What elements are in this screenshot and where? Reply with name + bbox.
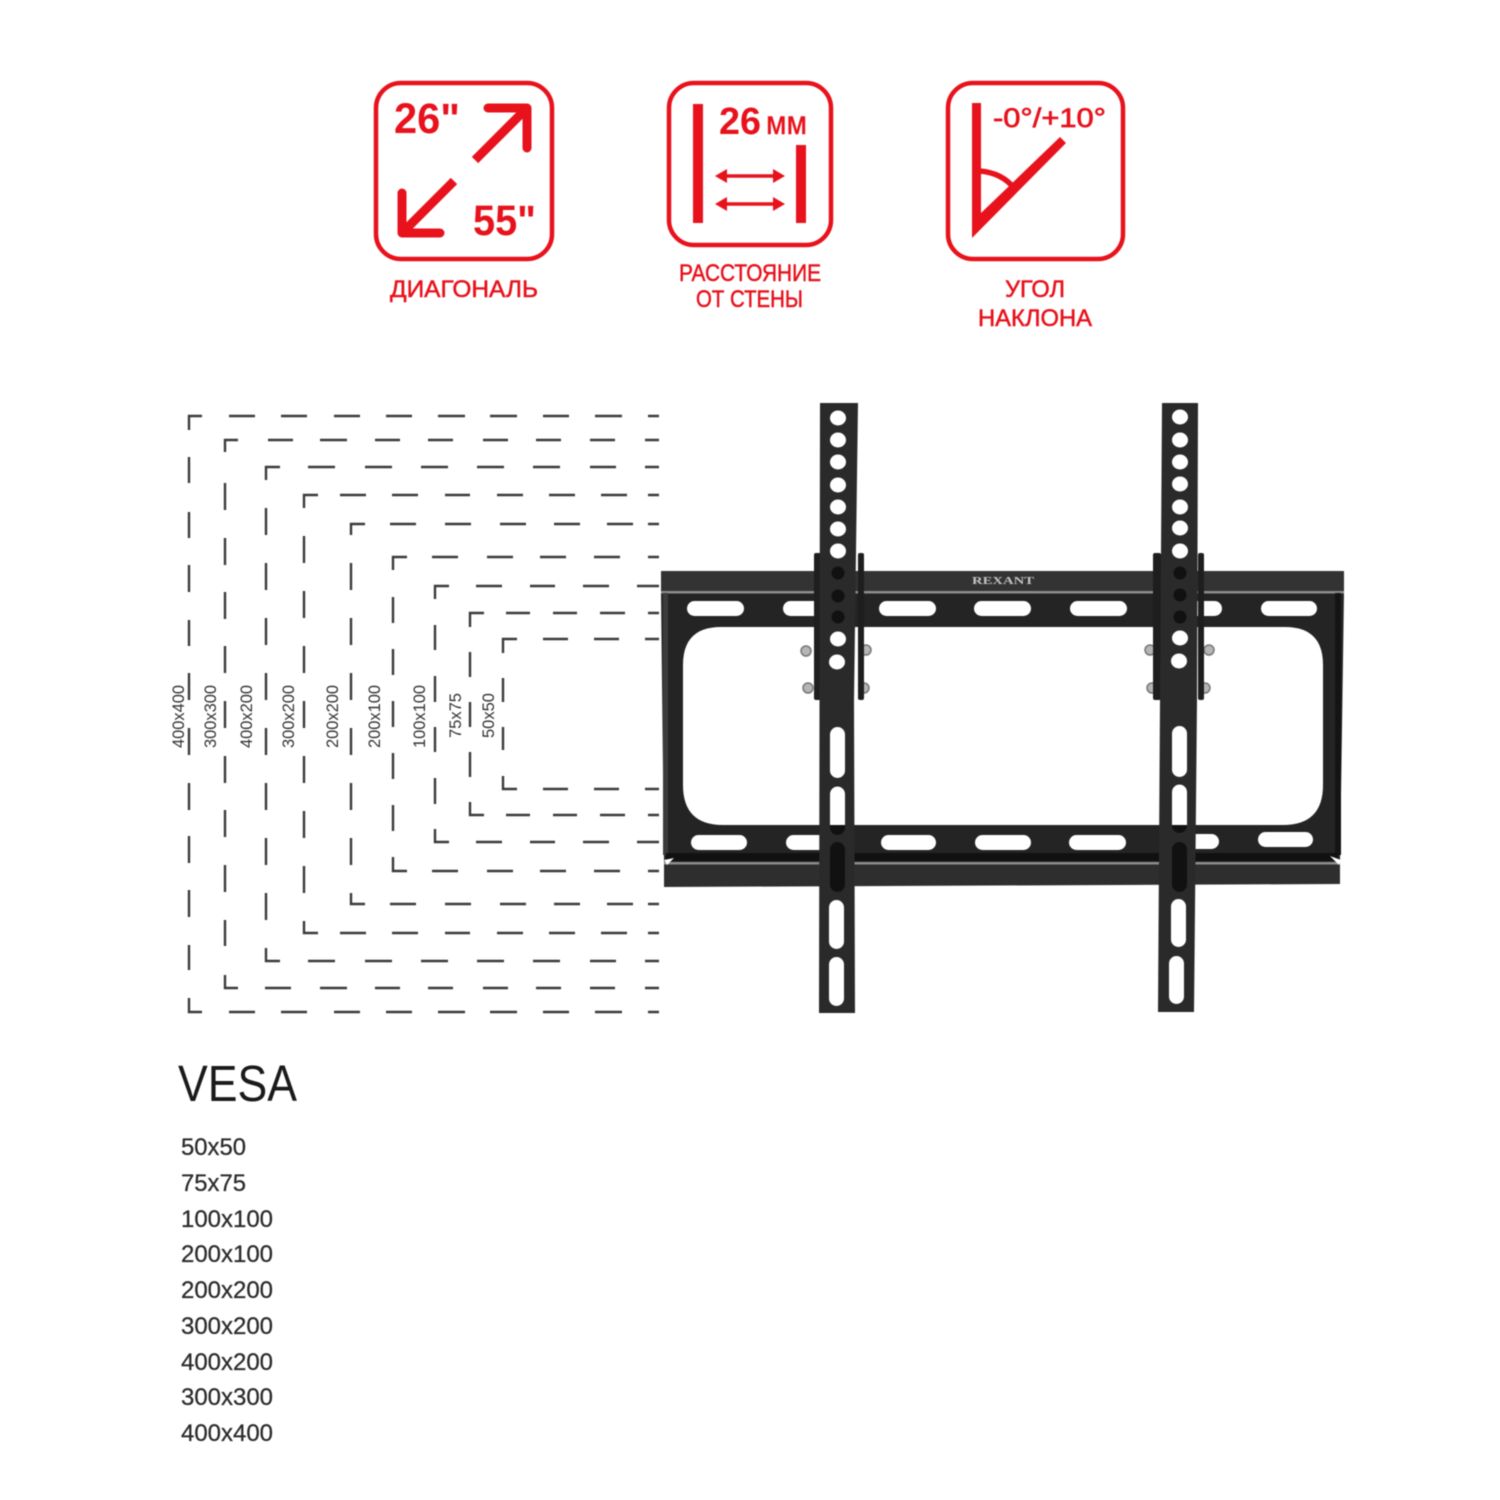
bracket: 100x100 <box>435 586 659 842</box>
label: diagonal: ДИАГОНАЛЬ <box>390 276 538 303</box>
vertical VESA size labels: 75x75 <box>447 693 465 738</box>
label: wall distance: ОТ СТЕНЫ <box>696 286 803 313</box>
icon: diagonal 26-55 inch: 26" <box>394 95 460 143</box>
list: VESA sizes: 200x200 <box>181 1277 273 1304</box>
TV wall mount <box>661 403 1344 1013</box>
vertical VESA size labels: 200x100 <box>366 685 384 748</box>
bracket: 300x300 <box>225 440 659 988</box>
label: wall distance <box>679 260 821 313</box>
bracket: 50x50 <box>503 639 659 789</box>
mount frame <box>661 571 1344 887</box>
mounting slots in frame <box>687 601 1317 850</box>
brand name: REXANT <box>972 576 1034 587</box>
bracket: 200x200 <box>351 524 659 904</box>
bracket: 200x100 <box>393 557 659 871</box>
list: VESA sizes: 300x200 <box>181 1313 273 1340</box>
icon: wall distance 26 mm: 26 <box>719 101 761 143</box>
label: tilt angle <box>978 276 1092 332</box>
vertical VESA size labels: 400x400 <box>170 685 188 748</box>
icon: diagonal 26-55 inch <box>376 83 552 259</box>
icon: tilt angle <box>948 83 1123 259</box>
bracket: 400x400 <box>189 416 659 1012</box>
vertical VESA size labels <box>170 685 498 748</box>
bracket: 300x200 <box>304 495 659 933</box>
left rail brackets <box>814 553 864 700</box>
list: VESA sizes: 400x200 <box>181 1349 273 1376</box>
bracket: 75x75 <box>470 613 659 815</box>
vertical VESA size labels: 200x200 <box>324 685 342 748</box>
list: VESA sizes: 200x100 <box>181 1241 273 1268</box>
icon: diagonal 26-55 inch: 55" <box>473 197 536 245</box>
vertical VESA size labels: 300x300 <box>202 685 220 748</box>
list: VESA sizes: 400x400 <box>181 1420 273 1447</box>
icon: wall distance 26 mm <box>669 83 831 245</box>
label: tilt angle: УГОЛ <box>1005 276 1065 303</box>
bracket: 400x200 <box>266 467 659 961</box>
list: VESA sizes: 100x100 <box>181 1206 273 1233</box>
list: VESA sizes: 300x300 <box>181 1384 273 1411</box>
list: VESA sizes: 75x75 <box>181 1170 246 1197</box>
icon: wall distance 26 mm: мм <box>766 104 807 141</box>
vertical VESA size labels: 50x50 <box>480 693 498 738</box>
list: VESA sizes <box>181 1134 273 1447</box>
list: VESA sizes: 50x50 <box>181 1134 246 1161</box>
vertical VESA size labels: 400x200 <box>238 685 256 748</box>
label: wall distance: РАССТОЯНИЕ <box>679 260 821 287</box>
vertical VESA size labels: 300x200 <box>280 685 298 748</box>
vertical VESA size labels: 100x100 <box>411 685 429 748</box>
right rail brackets <box>1153 553 1204 700</box>
label: tilt angle: НАКЛОНА <box>978 305 1092 332</box>
dashed VESA brackets <box>189 416 659 1012</box>
bolts <box>801 645 1214 693</box>
right vertical rail <box>1158 403 1198 1012</box>
heading: VESA: VESA <box>178 1055 297 1112</box>
left vertical rail <box>819 403 858 1013</box>
icon: tilt angle: -0°/+10° <box>993 103 1106 133</box>
